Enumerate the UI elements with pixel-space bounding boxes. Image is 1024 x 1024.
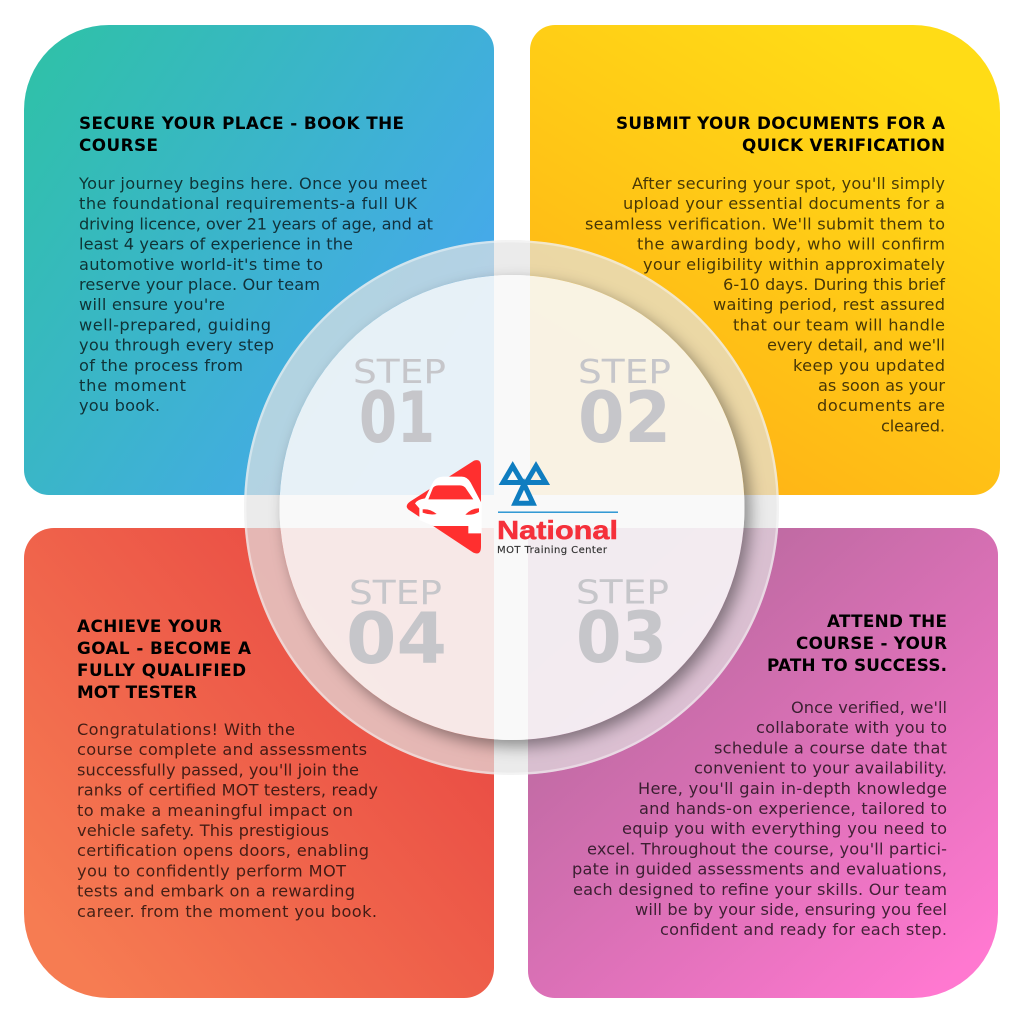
step 3 label: 03 [576,597,667,679]
step 4 label: 04 [346,598,447,680]
body text: step 2: waiting period, rest assured [713,295,945,314]
body text: step 3: collaborate with you to [756,718,947,737]
heading: step 4: ACHIEVE YOUR [77,616,222,636]
heading: step 2 [616,113,945,155]
step 1 label: STEP [353,352,446,391]
body text: step 4: Congratulations! With the [77,720,295,739]
body text: step 1: well-prepared, guiding [79,315,271,334]
step 1 label: 01 [359,377,435,459]
body text: step 4: vehicle safety. This prestigious [77,821,329,840]
step 2 label: STEP [578,352,671,391]
body text: step 4: ranks of certified MOT testers, ready [77,781,378,800]
step 2 label: 02 [578,377,671,459]
body text: step 4: career. from the moment you book. [77,902,377,921]
body text: step 4: you to confidently perform MOT [77,861,346,880]
icon: red play triangle with car [407,460,482,554]
panel: step 2 background [530,25,1000,495]
central glass ring [244,240,779,775]
panel text: step 2 [585,113,945,435]
body text: step 2: every detail, and we'll [767,336,945,355]
body text: step 1 [78,174,433,415]
body text: step 2 [585,174,945,435]
body text: step 1: you book. [79,396,160,415]
panel: step 1 background [24,25,494,495]
body text: step 1: the moment [79,376,186,395]
body text: step 4: to make a meaningful impact on [77,801,353,820]
central glass disc [280,275,744,740]
body text: step 2: 6-10 days. During this brief [723,275,945,294]
body text: step 1: least 4 years of experience in the [79,235,353,254]
step 4 label: STEP [349,573,442,612]
body text: step 1: Your journey begins here. Once you meet [78,174,427,193]
panel text: step 3 [572,611,947,939]
body text: step 3 [572,698,947,939]
heading: step 3: PATH TO SUCCESS. [767,655,947,675]
heading: step 3: COURSE - YOUR [796,633,947,653]
body text: step 4 [77,720,378,921]
body text: step 1: will ensure you're [79,295,225,314]
body text: step 4: certification opens doors, enabling [77,841,369,860]
body text: step 3: and hands-on experience, tailored to [639,799,947,818]
body text: step 1: driving licence, over 21 years of age, and at [79,214,433,233]
logo tagline: MOT Training Center [497,545,608,556]
panel text: step 1 [78,113,433,415]
panel: step 4 background [24,528,494,998]
body text: step 1: you through every step [79,336,274,355]
body text: step 3: Here, you'll gain in-depth knowledge [638,779,947,798]
body text: step 1: of the process from [79,356,243,375]
panel: step 3 background [528,528,998,998]
icon: blue MOT triple triangles [503,466,546,503]
heading: step 2: QUICK VERIFICATION [742,135,945,155]
body text: step 4: tests and embark on a rewarding [77,882,355,901]
heading: step 4: GOAL - BECOME A [77,638,251,658]
body text: step 2: seamless verification. We'll submit them to [585,214,945,233]
panel text: step 4 [77,616,378,921]
body text: step 2: that our team will handle [733,315,945,334]
divider line [498,512,618,513]
body text: step 2: the awarding body, who will confirm [637,235,945,254]
body text: step 2: documents are [817,396,945,415]
body text: step 3: equip you with everything you need to [622,819,947,838]
heading: step 4: FULLY QUALIFIED [77,660,246,680]
body text: step 3: schedule a course date that [714,738,947,757]
body text: step 2: cleared. [881,416,945,435]
heading: step 3: ATTEND THE [827,611,947,631]
body text: step 3: confident and ready for each step. [660,920,947,939]
step 1 label [353,352,446,459]
heading: step 1 [79,113,404,155]
heading: step 3 [767,611,947,675]
body text: step 2: upload your essential documents for a [623,194,945,213]
heading: step 1: COURSE [79,135,158,155]
body text: step 2: your eligibility within approximately [643,255,945,274]
body text: step 3: excel. Throughout the course, you'll partici- [587,839,947,858]
body text: step 2: After securing your spot, you'll simply [632,174,945,193]
body text: step 4: successfully passed, you'll join the [77,760,359,779]
body text: step 1: reserve your place. Our team [79,275,320,294]
body text: step 3: pate in guided assessments and evaluations, [572,860,947,879]
body text: step 2: as soon as your [818,376,945,395]
heading: step 4: MOT TESTER [77,682,197,702]
logo [407,460,618,556]
body text: step 3: will be by your side, ensuring you feel [635,900,947,919]
body text: step 1: automotive world-it's time to [79,255,323,274]
step 3 label: STEP [576,572,669,612]
heading: step 2: SUBMIT YOUR DOCUMENTS FOR A [616,113,945,133]
body text: step 1: the foundational requirements-a full UK [79,194,417,213]
body text: step 2: keep you updated [793,356,945,375]
heading: step 1: SECURE YOUR PLACE - BOOK THE [79,113,404,133]
body text: step 3: convenient to your availability. [694,759,947,778]
logo wordmark: National [497,515,618,545]
heading: step 4 [77,616,251,702]
body text: step 4: course complete and assessments [77,740,367,759]
body text: step 3: each designed to refine your skills. Our team [573,880,947,899]
body text: step 3: Once verified, we'll [791,698,947,717]
